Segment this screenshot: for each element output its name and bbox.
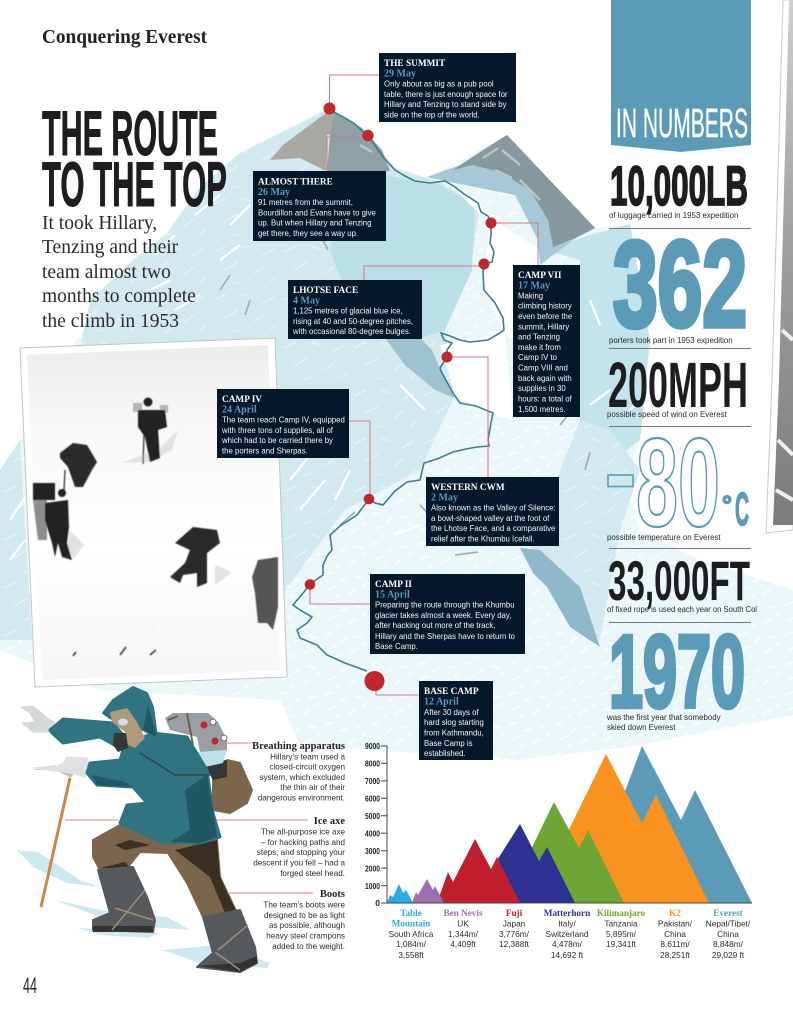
callout: camp II: 15 April [375, 590, 410, 600]
callout: camp VII: and Tenzing [518, 332, 560, 342]
photo: right-edge print [766, 0, 793, 533]
callout: camp II: Hillary and the Sherpas have to return to [375, 632, 516, 641]
label: Table Mountain: 3,558ft [398, 950, 424, 960]
callout: lhotse face: 1,125 metres of glacial blue ice, [293, 306, 403, 316]
note: ice axe: – for hacking paths and [261, 838, 345, 847]
callout: the summit: side on the top of the world. [384, 110, 480, 120]
axis labels: 4000 [365, 828, 380, 838]
callout: the summit: Only about as big as a pub pool [384, 80, 494, 88]
callout: camp VII: supplies in 30 [518, 384, 566, 393]
boots [93, 867, 155, 932]
note: breathing apparatus: Breathing apparatus [252, 741, 345, 752]
callout: camp II [370, 574, 525, 654]
label: K2: 28,251ft [660, 950, 691, 960]
note: ice axe: steps, and stopping your [257, 848, 345, 857]
callout: lhotse face: rising at 40 and 50-degree pitches, [293, 317, 413, 326]
callout: camp IV: The team reach Camp IV, equipped [222, 416, 345, 424]
label: Matterhorn: Matterhorn [544, 908, 590, 918]
callout: base camp: hard slog starting [424, 718, 484, 727]
callout: camp VII: Camp IV to [518, 353, 558, 362]
callout: camp VII: climbing history [518, 302, 572, 310]
note: ice axe: descent if you fell – had a [253, 858, 345, 868]
callout: camp VII: CAMP VII [518, 271, 562, 281]
callout: lhotse face [288, 280, 422, 339]
axis labels: 8000 [365, 758, 380, 768]
note: boots: as possible, although [269, 921, 345, 930]
Kilimanjaro [505, 802, 624, 903]
label: Matterhorn: 14,692 ft [551, 950, 584, 960]
callout: camp VII: summit, Hillary [518, 322, 569, 332]
callout: almost there: ALMOST THERE [258, 178, 333, 188]
callout: camp IV: the porters and Sherpas. [222, 446, 308, 456]
stat: -80 degrees [607, 414, 749, 553]
text: C [735, 483, 749, 535]
callout: camp IV [217, 389, 349, 458]
callout: western cwm [426, 477, 559, 546]
callout: camp VII: hours: a total of [518, 394, 573, 404]
callout: camp II: after hacking out more of the track, [375, 621, 495, 630]
callout: almost there: 91 metres from the summit, [258, 198, 353, 207]
note: breathing apparatus: closed-circuit oxygen [269, 762, 345, 772]
background: mountain illustration [0, 108, 793, 760]
title [42, 99, 227, 220]
callout: camp VII: Making [518, 292, 543, 300]
glove: lower hand [33, 757, 90, 777]
subtitle text [42, 213, 196, 332]
callout: camp VII [513, 265, 580, 417]
leader: ice axe left [65, 819, 118, 821]
callout: western cwm: WESTERN CWM [431, 483, 505, 493]
title: THE ROUTE [42, 99, 218, 169]
callout: base camp: from Kathmandu, [424, 728, 484, 738]
marker: camp II [305, 579, 315, 590]
callout: almost there: up. But when Hillary and Tenzing [258, 218, 371, 228]
callout: western cwm: Also known as the Valley of Silence: [431, 504, 556, 512]
label: Fuji: Fuji [506, 908, 523, 918]
Matterhorn [470, 824, 575, 903]
note: boots [227, 889, 346, 951]
callout: the summit [379, 53, 516, 122]
label: Everest: 29,029 ft [712, 950, 745, 960]
callout: lhotse face: LHOTSE FACE [293, 286, 358, 296]
stat: -80 degrees: ° [722, 491, 732, 519]
callout: the summit: THE SUMMIT [384, 59, 446, 69]
callout: camp VII: even before the [518, 312, 572, 321]
glove: upper hand [20, 706, 55, 732]
callout: camp IV: 24 April [222, 404, 257, 416]
note: ice axe [217, 816, 345, 878]
oxygen cylinders [165, 713, 227, 752]
label: Fuji: 3,776m/ [499, 929, 530, 939]
callout: almost there: 26 May [258, 187, 290, 198]
label: Kilimanjaro: 19,341ft [606, 939, 637, 949]
note: breathing apparatus: the thin air of their [280, 783, 345, 792]
label: Matterhorn: Switzerland [546, 929, 589, 939]
label: Matterhorn: 4,478m/ [552, 939, 583, 949]
stat: 200mph: possible speed of wind on Everest [607, 410, 728, 419]
in numbers banner [611, 0, 751, 152]
label: Ben Nevis: 4,409ft [450, 939, 476, 949]
callout: camp IV: CAMP IV [222, 395, 262, 405]
label: Kilimanjaro: Tanzania [604, 918, 638, 928]
note: boots: Boots [320, 889, 345, 900]
stat: 1970: was the first year that somebody [606, 713, 721, 722]
Table Mountain [387, 884, 413, 903]
label: Everest: Everest [713, 908, 744, 918]
label: Table Mountain: South Africa [389, 929, 434, 939]
subtitle text: team almost two [42, 262, 171, 283]
axis labels: 7000 [365, 776, 380, 786]
label: Everest: China [717, 929, 739, 939]
callout: lhotse face: 4 May [293, 296, 320, 306]
note: boots: The team's boots were [263, 900, 345, 910]
callout: western cwm: the Lhotse Face, and a comparative [431, 524, 555, 533]
axis labels: 9000 [365, 741, 380, 751]
callout: camp VII: back again with [518, 374, 572, 383]
callout: camp IV: with three tons of supplies, all of [221, 426, 334, 435]
label: K2: China [664, 929, 686, 939]
label: Kilimanjaro: 5,895m/ [606, 929, 637, 939]
callout: base camp: 12 April [424, 696, 459, 708]
callout: lhotse face: with occasional 80-degree bulges. [292, 327, 411, 336]
marker: summit [324, 102, 336, 114]
label: K2: 8,611m/ [660, 939, 690, 949]
label: Fuji: 12,388ft [499, 939, 530, 949]
callout: camp II: Base Camp. [375, 642, 418, 651]
stat: 1970: skied down Everest [607, 723, 676, 732]
callout: camp VII: 17 May [518, 280, 550, 292]
callout: base camp: BASE CAMP [424, 687, 479, 697]
note: breathing apparatus: system, which excluded [260, 773, 345, 782]
label: Kilimanjaro: Kilimanjaro [597, 908, 646, 918]
label: K2: K2 [669, 908, 681, 918]
route line [293, 110, 504, 671]
climber 4 [170, 527, 220, 587]
callout: the summit: Hillary and Tenzing to stand side by [384, 100, 507, 109]
stat: 10,000lb: of luggage carried in 1953 expedition [609, 211, 738, 220]
note: breathing apparatus [227, 741, 345, 802]
callout: base camp: Base Camp is [424, 739, 473, 748]
label: K2 [658, 908, 693, 960]
label: Fuji: Japan [503, 918, 526, 928]
note: breathing apparatus: dangerous environment. [258, 794, 345, 802]
hood [103, 687, 157, 737]
label: Everest [706, 908, 751, 960]
photo: climbers on snow [20, 338, 287, 687]
note: breathing apparatus: Hillary's team used a [270, 752, 345, 762]
climber 5 [252, 557, 278, 630]
label: Matterhorn [544, 908, 590, 960]
callout: almost there [253, 171, 386, 241]
axis labels [365, 741, 380, 908]
axis labels: 3000 [365, 846, 380, 856]
subtitle text: Tenzing and their [42, 237, 179, 258]
callout: almost there: Bourdillon and Evans have to give [258, 208, 376, 218]
axis labels: 1000 [365, 881, 380, 891]
label: K2: Pakistan/ [658, 918, 693, 928]
callout: the summit: 29 May [384, 68, 416, 80]
climber 2 [60, 443, 97, 490]
text: TO THE TOP [42, 150, 227, 220]
callout: almost there: get there, they see a way up. [258, 229, 358, 238]
label: Ben Nevis [443, 908, 483, 949]
illustration: climber [17, 687, 270, 972]
callout: western cwm: a bowl-shaped valley at the foot of [431, 514, 550, 523]
section label: Conquering Everest [42, 26, 207, 48]
label: Kilimanjaro [597, 908, 646, 949]
stat: -80 degrees: 80 [636, 414, 720, 553]
leader lines [310, 75, 538, 695]
callout: camp II: glacier takes almost a week. Every day, [375, 611, 511, 620]
marker: Lhotse face [478, 258, 490, 270]
callout: camp VII: Camp VIII and [518, 364, 568, 372]
bag [213, 760, 252, 813]
coat [50, 719, 220, 843]
callout: base camp [419, 681, 493, 760]
climber 1 [133, 398, 168, 464]
note: boots: added to the weight. [272, 942, 345, 951]
callout: camp VII: 1,500 metres. [518, 405, 566, 414]
axis labels: 5000 [365, 811, 380, 821]
marker: Western Cwm [442, 352, 452, 362]
K2 [533, 754, 709, 903]
stat: 362: porters took part in 1953 expedition [609, 336, 733, 345]
axis labels: 2000 [365, 864, 380, 874]
Everest [583, 746, 752, 903]
label: Ben Nevis: Ben Nevis [443, 908, 483, 918]
Fuji [437, 839, 520, 903]
stat: 33,000ft: of fixed rope is used each year on South Col [607, 605, 757, 614]
marker: camp VII [486, 218, 496, 228]
label: Ben Nevis: 1,344m/ [448, 929, 479, 939]
label: Table Mountain: Mountain [392, 918, 430, 928]
label: Everest: 8,848m/ [713, 939, 744, 949]
label: Table Mountain: 1,084m/ [396, 939, 427, 949]
subtitle text: It took Hillary, [42, 213, 157, 234]
subtitle text: the climb in 1953 [42, 311, 179, 332]
callout: camp II: CAMP II [375, 580, 412, 590]
stat: -80 degrees: possible temperature on Everest [607, 533, 721, 542]
axis labels: 6000 [365, 794, 380, 804]
Ben Nevis [412, 879, 444, 903]
trousers [93, 825, 238, 917]
callout: base camp: After 30 days of [424, 708, 479, 717]
label: Everest: Nepal/Tibet/ [706, 918, 751, 928]
axis labels: 0 [375, 898, 380, 908]
ice axe [41, 778, 70, 907]
callout: camp II: Preparing the route through the Khumbu [375, 600, 515, 610]
note: ice axe: forged steel head. [280, 869, 345, 878]
marker: almost there [362, 130, 374, 141]
axes [381, 746, 752, 903]
subtitle text: months to complete [42, 286, 196, 307]
note: boots: heavy steel crampons [266, 932, 345, 940]
callout: camp VII: make it from [518, 343, 561, 352]
label: Table Mountain: Table [400, 908, 422, 918]
callout: the summit: table, there is just enough space for [384, 90, 508, 99]
mountain height chart [365, 741, 752, 960]
callout: western cwm: relief after the Khumbu Icefall. [431, 534, 535, 544]
marker: base camp [364, 671, 384, 691]
page number: 44 [23, 973, 37, 998]
note: ice axe: The all-purpose ice axe [261, 828, 345, 836]
label: Table Mountain [389, 908, 434, 960]
callout: camp IV: which had to be carried there by [221, 436, 333, 445]
callout: western cwm: 2 May [431, 492, 458, 504]
climber 3 [33, 483, 72, 560]
label: Matterhorn: Italy/ [558, 918, 576, 928]
callout: base camp: established. [424, 749, 466, 758]
marker: camp IV [364, 494, 374, 504]
label: Fuji [499, 908, 530, 949]
note: boots: designed to be as light [264, 911, 346, 920]
note: ice axe: Ice axe [314, 816, 345, 827]
label: Ben Nevis: UK [457, 918, 469, 928]
face [110, 708, 145, 748]
